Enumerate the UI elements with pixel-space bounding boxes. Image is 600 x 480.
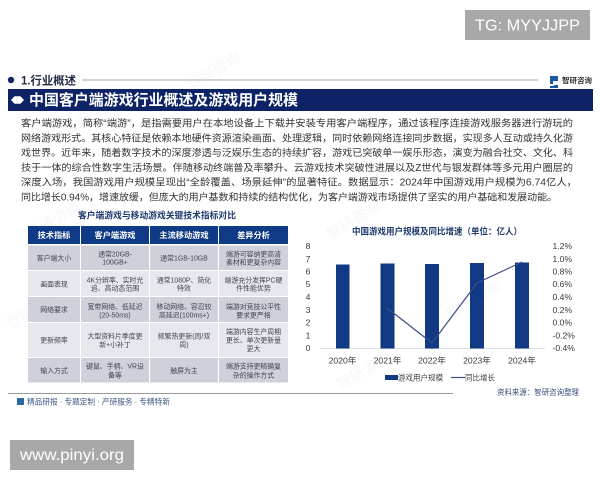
row: 客户端大小: 通常20GB- <box>98 250 132 258</box>
section header: 1.行业概述 <box>8 74 538 88</box>
table header row: 客户端游戏 <box>95 230 135 240</box>
row: 客户端大小: 客户端大小 <box>37 254 71 262</box>
table header row <box>28 226 288 244</box>
row: 更新频率: 频繁热更新(周/双 <box>158 332 210 340</box>
combo chart: users and growth <box>306 241 575 382</box>
row: 网络要求: 要求更严格 <box>236 310 271 320</box>
row: 画面表现: 特效 <box>177 284 191 292</box>
section header: 1.行业概述: 1.行业概述 <box>21 74 76 88</box>
right axis labels: 1.0% <box>552 254 572 264</box>
text: 智研咨询 <box>33 108 94 153</box>
row: 输入方式: 输入方式 <box>40 366 68 375</box>
left axis labels: 5 <box>306 279 311 289</box>
x axis labels: 2024年 <box>508 354 536 366</box>
logo: 智研咨询 <box>550 75 592 88</box>
row: 客户端大小: 100GB+ <box>102 260 128 266</box>
row: 网络要求 <box>28 297 288 322</box>
line: yoy growth <box>387 262 522 343</box>
row: 画面表现 <box>28 271 288 296</box>
comparison table <box>28 226 288 382</box>
left axis labels: 4 <box>306 292 311 302</box>
left axis labels: 1 <box>306 330 311 340</box>
row: 网络要求: (20-50ms) <box>99 312 131 320</box>
text: 智研咨询 <box>333 348 394 393</box>
badge: website watermark <box>10 440 134 470</box>
right axis labels: -0.4% <box>552 343 575 353</box>
right axis labels: 0.0% <box>552 318 572 328</box>
x axis labels: 2023年 <box>463 354 491 366</box>
row: 更新频率: 更新频率 <box>40 336 68 344</box>
chart legend: 同比增长 <box>465 372 495 382</box>
row: 输入方式 <box>28 358 288 382</box>
row: 输入方式: 键鼠、手柄、VR设 <box>86 362 144 370</box>
text: 智研咨询 <box>513 128 574 173</box>
text block: intro paragraph <box>21 116 577 204</box>
row: 画面表现: 4K分辨率、实时光 <box>87 276 143 284</box>
row: 网络要求: 端游对竞技公平性 <box>226 302 281 311</box>
text block: intro paragraph: 同比增长0.94%，增速放缓，但庞大的用户基数和持续的结构优化，为客户端游戏市场提供了坚实的用户基础和发展动能。 <box>21 190 557 204</box>
text block: intro paragraph: 客户端游戏，简称“端游”，是指需要用户在本地设备上下载并安装专用客户端程序，通过该程序连接游戏服务器进行游玩的 <box>21 116 573 130</box>
right axis labels <box>552 241 575 353</box>
right axis labels: -0.2% <box>552 330 575 340</box>
text block: intro paragraph: 深度入场，我国游戏用户规模呈现出“全龄覆盖、场景延伸”的显著特征。数据显示：2024年中国游戏用户规模为6.74亿人， <box>21 176 577 188</box>
row: 更新频率: 大型资料片季度更 <box>87 332 143 340</box>
chart legend: 游戏用户规模 <box>398 372 443 382</box>
row: 更新频率: 新+小补丁 <box>99 340 131 349</box>
title bar <box>8 89 593 111</box>
table title: 客户端游戏与移动游戏关键技术指标对比 <box>78 210 236 220</box>
badge: website watermark: www.pinyi.org <box>19 447 124 464</box>
text: 智研咨询 <box>323 198 384 243</box>
row: 更新频率 <box>28 323 288 357</box>
row: 更新频率: 端游内容生产周期 <box>226 327 281 336</box>
logo: 智研咨询: 智研咨询 <box>562 75 592 85</box>
table header row: 差异分析 <box>237 230 270 240</box>
left axis labels: 3 <box>306 305 311 315</box>
row: 网络要求: 宽带网络、低延迟 <box>87 302 143 311</box>
x axis labels <box>329 354 536 366</box>
row: 更新频率: 更大 <box>247 344 260 353</box>
badge: TG watermark <box>465 10 590 40</box>
left axis labels: 0 <box>306 343 311 353</box>
row: 网络要求: 高延迟(100ms+) <box>159 310 209 320</box>
left axis labels: 2 <box>306 318 311 328</box>
row: 画面表现: 追、高动态范围 <box>91 284 139 292</box>
left axis labels <box>306 241 311 353</box>
table header row: 技术指标 <box>38 230 70 240</box>
text block: intro paragraph: 技于一体的综合性数字生活场景。伴随移动终端普及率攀升、云游戏技术突破性进展以及Z世代与银发群体等多元用户圈层的 <box>21 161 573 174</box>
row: 客户端大小 <box>28 246 288 270</box>
bars: user scale <box>336 262 529 348</box>
row: 客户端大小: 端游可容纳更高清 <box>226 250 281 258</box>
row: 输入方式: 备等 <box>108 370 122 380</box>
text: 智研咨询 <box>23 198 84 243</box>
x axis labels: 2021年 <box>374 354 402 366</box>
table header row: 主流移动游戏 <box>159 230 209 240</box>
row: 更新频率: 更长、单次更新量 <box>226 336 281 344</box>
row: 输入方式: 触屏为主 <box>170 366 198 375</box>
right axis labels: 1.2% <box>552 241 572 251</box>
right axis labels: 0.2% <box>552 305 572 315</box>
row: 网络要求: 网络要求 <box>40 305 68 314</box>
text: 智研咨询 <box>183 48 244 93</box>
right axis labels: 0.8% <box>552 266 572 276</box>
row: 网络要求: 移动网络、容忍较 <box>156 302 212 311</box>
chart legend <box>385 372 495 382</box>
right axis labels: 0.4% <box>552 292 572 302</box>
row: 客户端大小: 通常1GB-10GB <box>160 254 208 262</box>
row: 更新频率: 周) <box>179 341 189 349</box>
row: 输入方式: 端游支持更精确复 <box>226 362 281 370</box>
left axis labels: 6 <box>306 266 311 276</box>
row: 画面表现: 通常1080P、简化 <box>157 276 211 284</box>
footer: tagline <box>8 394 453 406</box>
badge: TG watermark: TG: MYYJJPP <box>475 18 580 34</box>
row: 输入方式: 杂的操作方式 <box>233 370 274 380</box>
text: 智研咨询 <box>3 288 64 333</box>
row: 画面表现: 画面表现 <box>40 280 68 288</box>
footer: tagline: 精品研报 · 专题定制 · 产研服务 · 专精特新 <box>27 396 170 406</box>
left axis labels: 7 <box>306 254 311 264</box>
right axis labels: 0.6% <box>552 279 572 289</box>
text block: intro paragraph: 网络游戏形式。其核心特征是依赖本地硬件资源渲染画面、处理逻辑，同时依赖网络连接同步数据，实现多人互动或持久化游 <box>21 132 573 144</box>
row: 画面表现: 件性能优势 <box>236 284 271 292</box>
title bar: 中国客户端游戏行业概述及游戏用户规模 <box>29 91 298 109</box>
text: 智研咨询 <box>443 278 504 323</box>
x axis labels: 2020年 <box>329 354 357 366</box>
source note: 资料来源：智研咨询整理 <box>497 387 579 397</box>
chart title: 中国游戏用户规模及同比增速（单位：亿人） <box>352 226 522 236</box>
left axis labels: 8 <box>306 241 311 251</box>
row: 画面表现: 端游充分发挥PC硬 <box>225 276 283 284</box>
text block: intro paragraph: 戏世界。近年来，随着数字技术的深度渗透与泛娱乐生态的持续扩容，游戏已突破单一娱乐形态，演变为融合社交、文化、科 <box>21 146 573 159</box>
x axis labels: 2022年 <box>418 354 446 366</box>
row: 客户端大小: 素材和更复杂内容 <box>226 258 281 266</box>
